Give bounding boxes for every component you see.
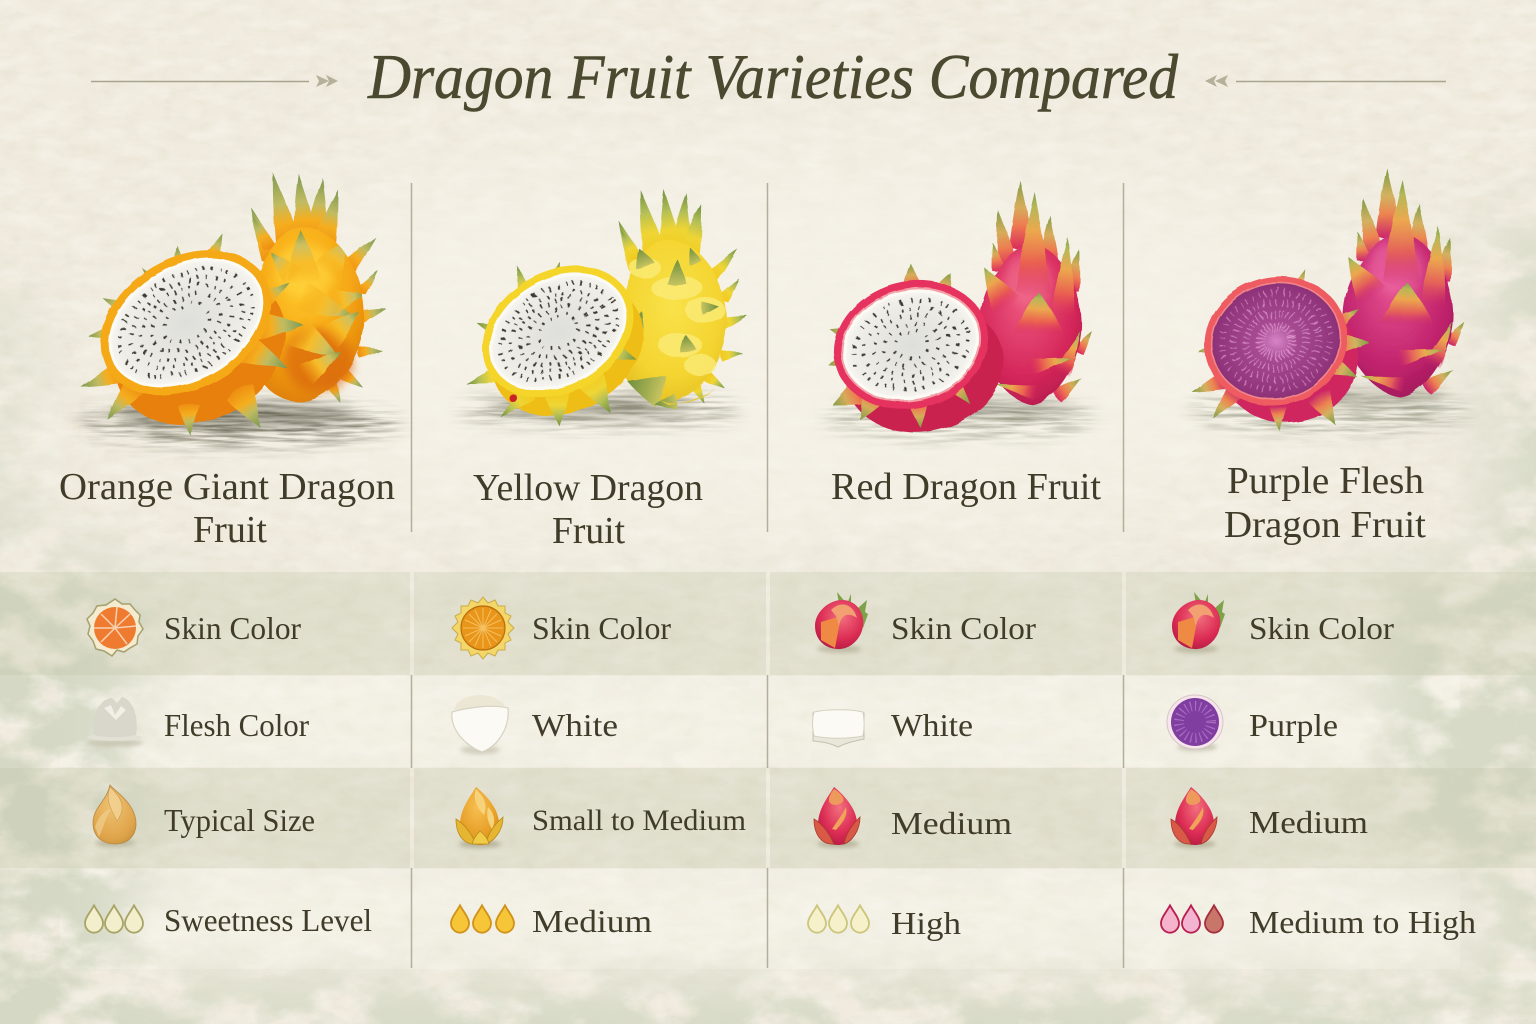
row: flesh color: White — [891, 707, 973, 743]
heading: Yellow Dragon Fruit: Yellow Dragon — [473, 467, 703, 509]
row: sweetness level: Sweetness Level — [164, 902, 372, 938]
panel: Orange Giant Dragon Fruit — [59, 171, 400, 938]
title ornament: left arrow rule — [91, 75, 338, 87]
illustration: orange dragon fruit — [75, 171, 400, 455]
row: skin color — [815, 592, 1036, 653]
icon: white shield — [452, 695, 508, 754]
heading: Red Dragon Fruit: Red Dragon Fruit — [831, 466, 1101, 508]
icon: red bud — [1171, 787, 1217, 848]
icon: golden bud — [456, 787, 503, 848]
heading: Orange Giant Dragon Fruit: Fruit — [193, 509, 267, 551]
panel: Red Dragon Fruit — [808, 180, 1101, 941]
row: skin color — [87, 599, 301, 656]
icon: three golden drops — [451, 905, 514, 933]
icon: grey dome — [87, 697, 143, 747]
row: sweetness level: High — [891, 905, 961, 941]
row: flesh color — [87, 697, 309, 747]
row: typical size: Medium — [1249, 804, 1368, 840]
row: skin color: Skin Color — [891, 610, 1036, 646]
panel: Yellow Dragon Fruit — [451, 187, 750, 939]
row: skin color — [452, 597, 671, 659]
row: typical size — [93, 785, 315, 847]
heading: Orange Giant Dragon Fruit: Orange Giant Dragon — [59, 466, 395, 508]
row: flesh color: Purple — [1249, 707, 1338, 743]
icon: white pillow — [812, 710, 864, 747]
icon: small pink fruit — [1172, 592, 1225, 653]
icon: tan bud — [93, 785, 136, 847]
illustration: red dragon fruit — [819, 180, 1097, 450]
row: sweetness level — [451, 903, 652, 939]
row: flesh color: Flesh Color — [164, 707, 309, 743]
row: sweetness level: Medium — [532, 903, 652, 939]
title ornament: right arrow rule — [1205, 75, 1446, 87]
row: sweetness level — [1161, 904, 1476, 940]
icon: yellow sun slice — [452, 597, 514, 659]
heading: Yellow Dragon Fruit: Fruit — [552, 510, 625, 552]
row: typical size: Typical Size — [164, 802, 315, 838]
row: flesh color — [812, 707, 973, 747]
illustration: purple flesh dragon fruit — [1189, 168, 1470, 434]
row: flesh color: White — [532, 707, 618, 743]
icon: three pink drops — [1161, 905, 1223, 933]
row: skin color: Skin Color — [1249, 610, 1394, 646]
icon: small red fruit — [815, 592, 868, 653]
icon: three pale drops — [85, 905, 143, 933]
row: sweetness level — [808, 905, 961, 941]
heading: Purple Flesh Dragon Fruit: Purple Flesh — [1227, 460, 1424, 502]
icon: orange slice badge — [87, 599, 143, 656]
icon: purple slice — [1167, 695, 1223, 751]
illustration: yellow dragon fruit — [459, 187, 750, 442]
icon: three pale yellow drops — [808, 905, 869, 933]
row: flesh color — [1167, 695, 1338, 751]
heading: Purple Flesh Dragon Fruit — [1224, 460, 1426, 546]
row: skin color: Skin Color — [164, 610, 301, 646]
row: skin color: Skin Color — [532, 610, 671, 646]
heading: Yellow Dragon Fruit — [473, 467, 703, 552]
row: typical size: Small to Medium — [532, 804, 746, 837]
row: typical size — [1171, 787, 1368, 848]
row: typical size: Medium — [891, 805, 1012, 841]
heading: Purple Flesh Dragon Fruit: Dragon Fruit — [1224, 504, 1426, 546]
row: skin color — [1172, 592, 1394, 653]
heading: Orange Giant Dragon Fruit — [59, 466, 395, 551]
title: Dragon Fruit Varieties Compared — [367, 41, 1179, 112]
icon: red bud — [814, 787, 860, 848]
row: flesh color — [452, 695, 618, 754]
row: sweetness level: Medium to High — [1249, 904, 1476, 940]
row: typical size — [814, 787, 1012, 848]
row: typical size — [456, 787, 746, 848]
panel: Purple Flesh Dragon Fruit — [1161, 168, 1476, 940]
